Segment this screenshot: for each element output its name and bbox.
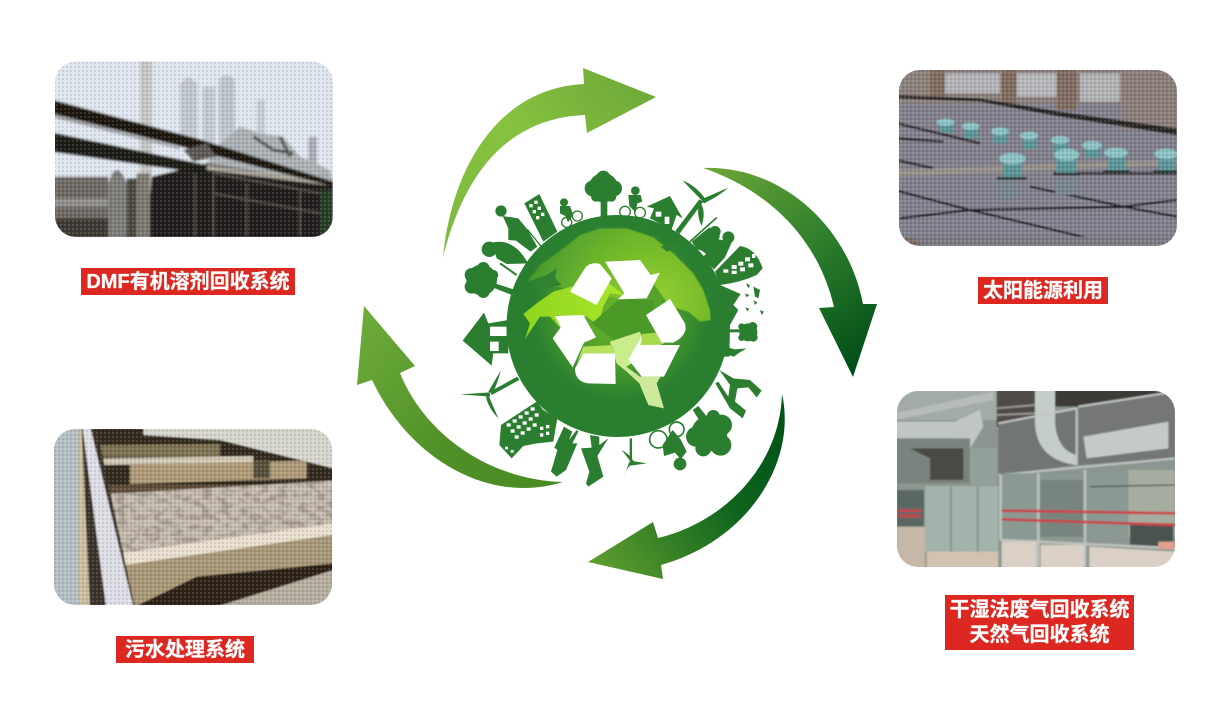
continent: central mid green xyxy=(592,298,657,340)
icon: big tree bottom right xyxy=(686,406,732,456)
label: solar energy use: 太阳能源利用 xyxy=(983,280,1103,302)
icon: cyclist two xyxy=(620,186,645,218)
illustration canvas xyxy=(54,62,1177,605)
city silhouettes around the planet xyxy=(460,171,764,487)
icon: left tree xyxy=(465,262,513,298)
icon: left wind turbine xyxy=(460,371,519,418)
label: sewage treatment: 污水处理系统 xyxy=(125,639,245,661)
continent: small lower lime xyxy=(577,345,615,363)
icon: recycling symbol xyxy=(553,260,686,384)
icon: right small tree xyxy=(727,322,758,342)
continent: lime patch xyxy=(642,333,664,345)
label: exhaust and natural gas recovery xyxy=(945,595,1134,650)
continent: bright landmass xyxy=(523,282,624,339)
recycle top left band xyxy=(570,263,612,305)
arrow: bottom dark to mid green xyxy=(588,394,785,579)
arrow: left mid green xyxy=(357,306,563,488)
recycle left arrow xyxy=(553,315,596,367)
icon: top house xyxy=(647,196,683,229)
recycle bottom right arrow xyxy=(628,337,680,377)
continent: pale southern tip xyxy=(617,363,664,408)
icon: standing person xyxy=(495,205,544,252)
recycle right band xyxy=(646,299,686,343)
photo: DMF solvent recovery plant xyxy=(53,60,337,240)
label: exhaust and natural gas recovery: 干湿法废气回收系统 xyxy=(950,599,1130,621)
arrow: top light green xyxy=(443,68,656,257)
icon: bottom person one xyxy=(581,435,608,487)
icon: small birds xyxy=(745,283,764,315)
icon: family with kite xyxy=(690,218,734,269)
photo: dry and wet exhaust recovery equipment xyxy=(895,390,1177,568)
icon: cyclist one xyxy=(560,198,582,227)
continent: pale south band xyxy=(610,332,663,367)
photo: sewage treatment tank xyxy=(52,427,335,608)
label: DMF solvent recovery: DMF有机溶剂回收系统 xyxy=(86,271,290,293)
icon: upper left tower xyxy=(524,194,557,242)
icon: top right wind turbine xyxy=(675,181,728,234)
icon: left house xyxy=(463,313,508,366)
icon: curved building right xyxy=(715,246,763,285)
planet with continents and recycling symbol xyxy=(506,215,728,437)
icon: right walker figures xyxy=(715,370,762,418)
icon: stooped person with cane xyxy=(482,242,528,275)
icon: bottom cyclist xyxy=(650,422,687,470)
icon: bottom person two xyxy=(551,427,578,477)
icon: lower left grid building xyxy=(499,402,557,458)
icon: top tree xyxy=(585,171,622,217)
continent details: dark islands xyxy=(527,242,682,288)
photo: rooftop ventilators xyxy=(897,68,1180,248)
icon: small bottom turbine xyxy=(622,438,647,477)
icon: small person on right xyxy=(725,347,747,357)
label: exhaust and natural gas recovery: 天然气回收系统 xyxy=(970,624,1110,646)
recycle bottom band xyxy=(575,353,616,384)
continent: upper landmass xyxy=(527,228,711,322)
arrow: right dark green xyxy=(703,168,877,377)
icon: skyline block on right edge xyxy=(707,282,741,357)
recycle top arrow xyxy=(605,260,660,299)
globe sphere xyxy=(506,215,728,437)
